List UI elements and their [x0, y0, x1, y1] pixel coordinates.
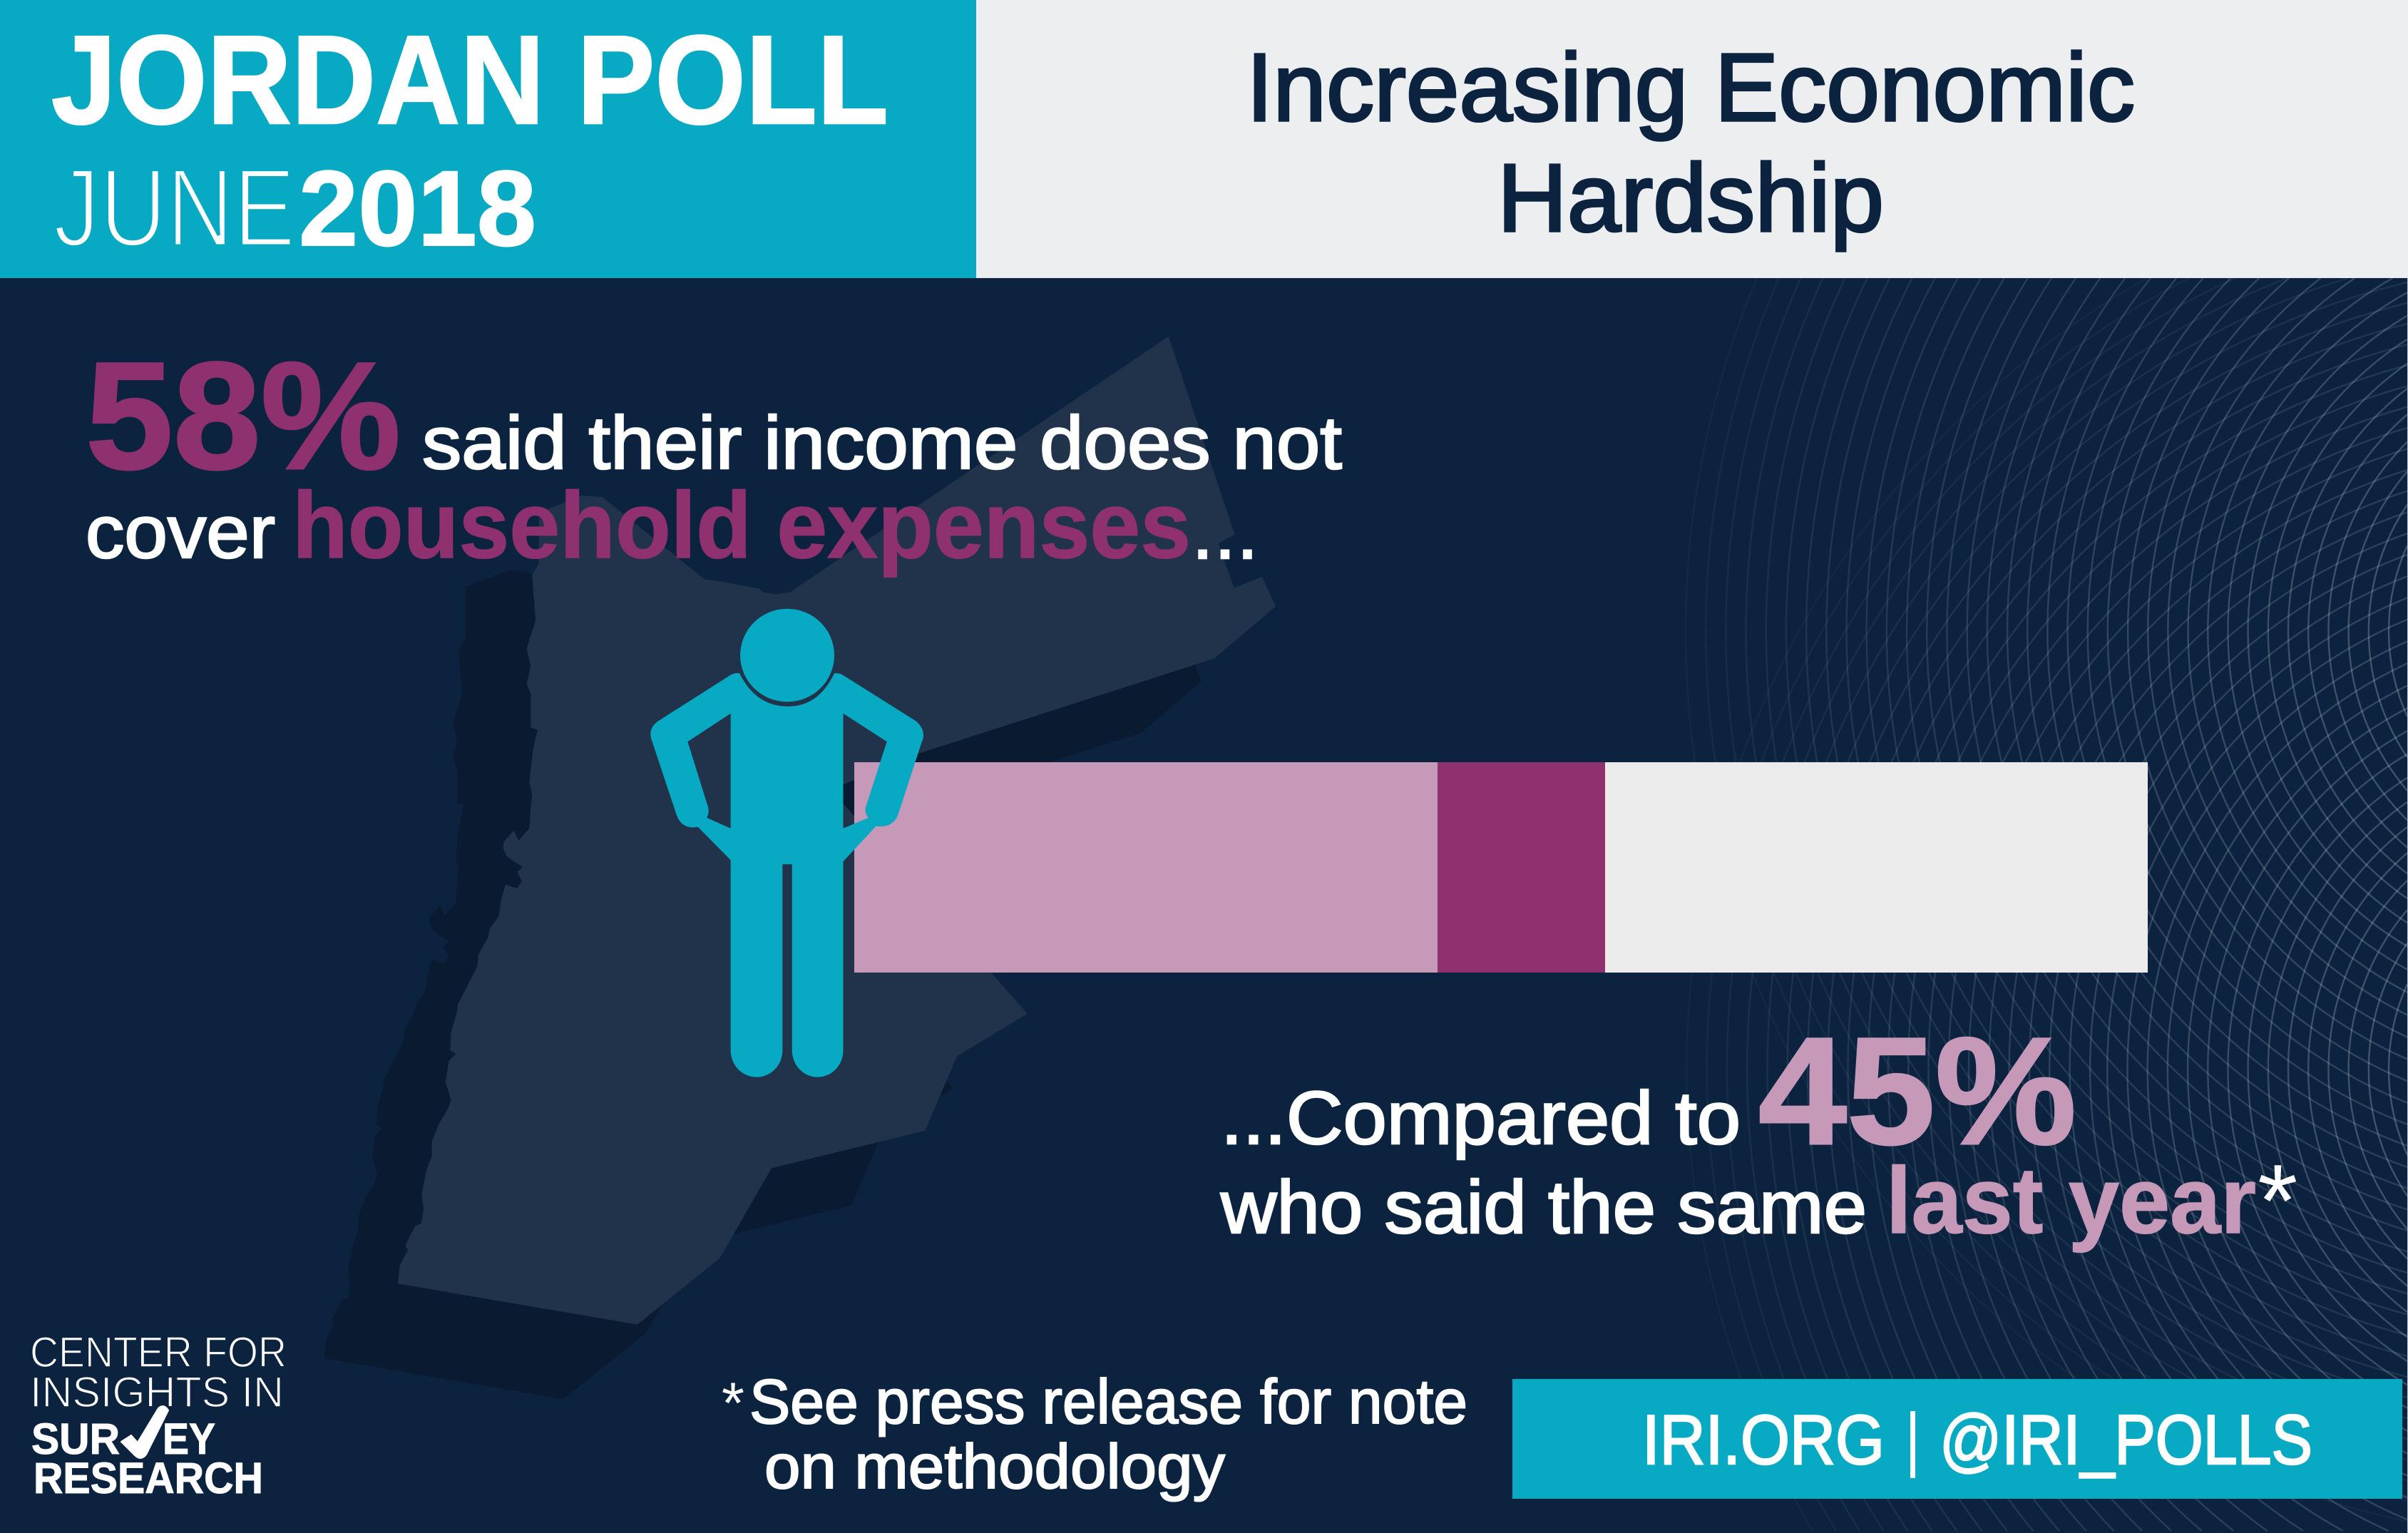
bar segment: remainder	[1605, 762, 2148, 973]
text: said their income does not: said their income does not	[422, 401, 1342, 485]
icon: person with empty pockets	[650, 609, 923, 1077]
stacked bar chart	[854, 762, 2148, 973]
logo line 2: INSIGHTS IN	[30, 1368, 284, 1416]
footnote	[722, 1366, 1467, 1502]
logo line 1: CENTER FOR	[30, 1328, 287, 1376]
icon body	[650, 673, 923, 1077]
logo line 4: RESEARCH	[34, 1454, 263, 1502]
footnote line 1: See press release for note	[749, 1366, 1467, 1437]
title line 1: Increasing Economic	[1246, 34, 2135, 141]
subheading: June: JUNE	[53, 146, 295, 270]
text: twitter handle: @IRI_POLLS	[1940, 1400, 2312, 1479]
bar segment: 2017 share	[854, 762, 1438, 973]
text: last year: last year	[1886, 1148, 2256, 1253]
map shadow	[324, 411, 1202, 1399]
big number 45%: 45%	[1758, 1006, 2076, 1176]
logo line 3b: EY	[163, 1415, 215, 1463]
bar segment: increase	[1438, 762, 1605, 973]
footnote asterisk: *	[722, 1371, 744, 1436]
text: asterisk: *	[2258, 1143, 2297, 1258]
text: ellipsis: ...	[1192, 491, 1258, 575]
header panel: title	[976, 0, 2408, 278]
logo line 3a: SUR	[31, 1415, 120, 1463]
icon: check mark	[121, 1406, 168, 1458]
footnote line 2: on methodology	[764, 1431, 1225, 1502]
map of Jordan with shadow	[324, 337, 1276, 1399]
text: household expenses: household expenses	[292, 473, 1191, 578]
big number 58%: 58%	[86, 331, 401, 501]
logo: Center for Insights in Survey Research	[30, 1328, 287, 1502]
subheading: 2018: 2018	[299, 148, 536, 268]
callout: 58 percent statement	[86, 331, 1342, 578]
heading: Jordan Poll: JORDAN POLL	[51, 9, 888, 150]
text: compared to: ...Compared to	[1221, 1077, 1741, 1160]
text: who said the same: who said the same	[1220, 1166, 1867, 1249]
title line 2: Hardship	[1497, 144, 1884, 252]
website and social box	[1512, 1379, 2402, 1499]
text: website: IRI.ORG	[1642, 1400, 1885, 1479]
divider bar	[1910, 1411, 1915, 1478]
text: cover: cover	[86, 491, 275, 574]
header panel: poll name	[0, 0, 976, 278]
icon head	[740, 609, 834, 702]
map shape	[398, 337, 1276, 1325]
callout: 45 percent statement	[1220, 1006, 2297, 1258]
